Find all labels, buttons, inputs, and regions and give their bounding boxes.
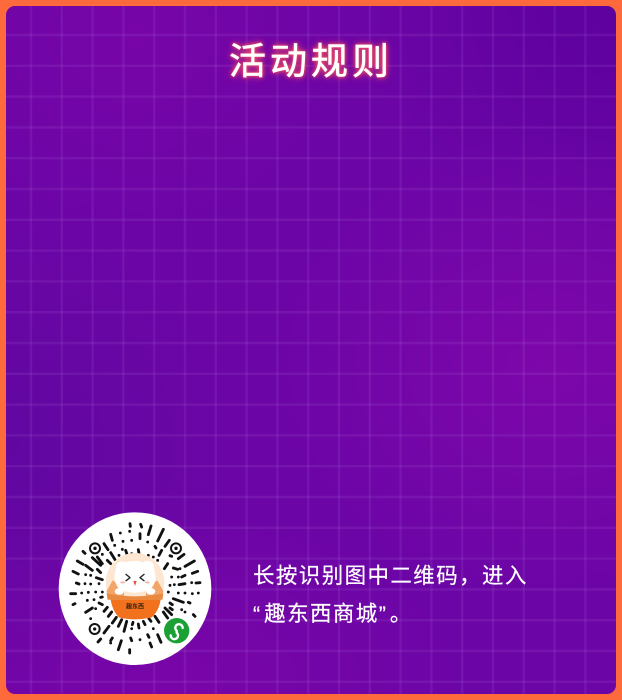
- title: 活动规则: [229, 31, 393, 85]
- caption text: 长按识别图中二维码，进入: [253, 564, 528, 588]
- caption text: “趣东西商城”。: [253, 602, 413, 626]
- finder: bottom left: [90, 624, 100, 634]
- icon: mini program logo: [164, 618, 189, 643]
- finder: top right: [171, 543, 181, 553]
- logo text: 趣东西: [126, 603, 144, 611]
- caption text: [253, 564, 528, 626]
- QR code: [58, 512, 212, 665]
- finder: top left: [90, 543, 100, 553]
- code marks: [71, 524, 200, 653]
- logo: bear in box: [106, 553, 164, 619]
